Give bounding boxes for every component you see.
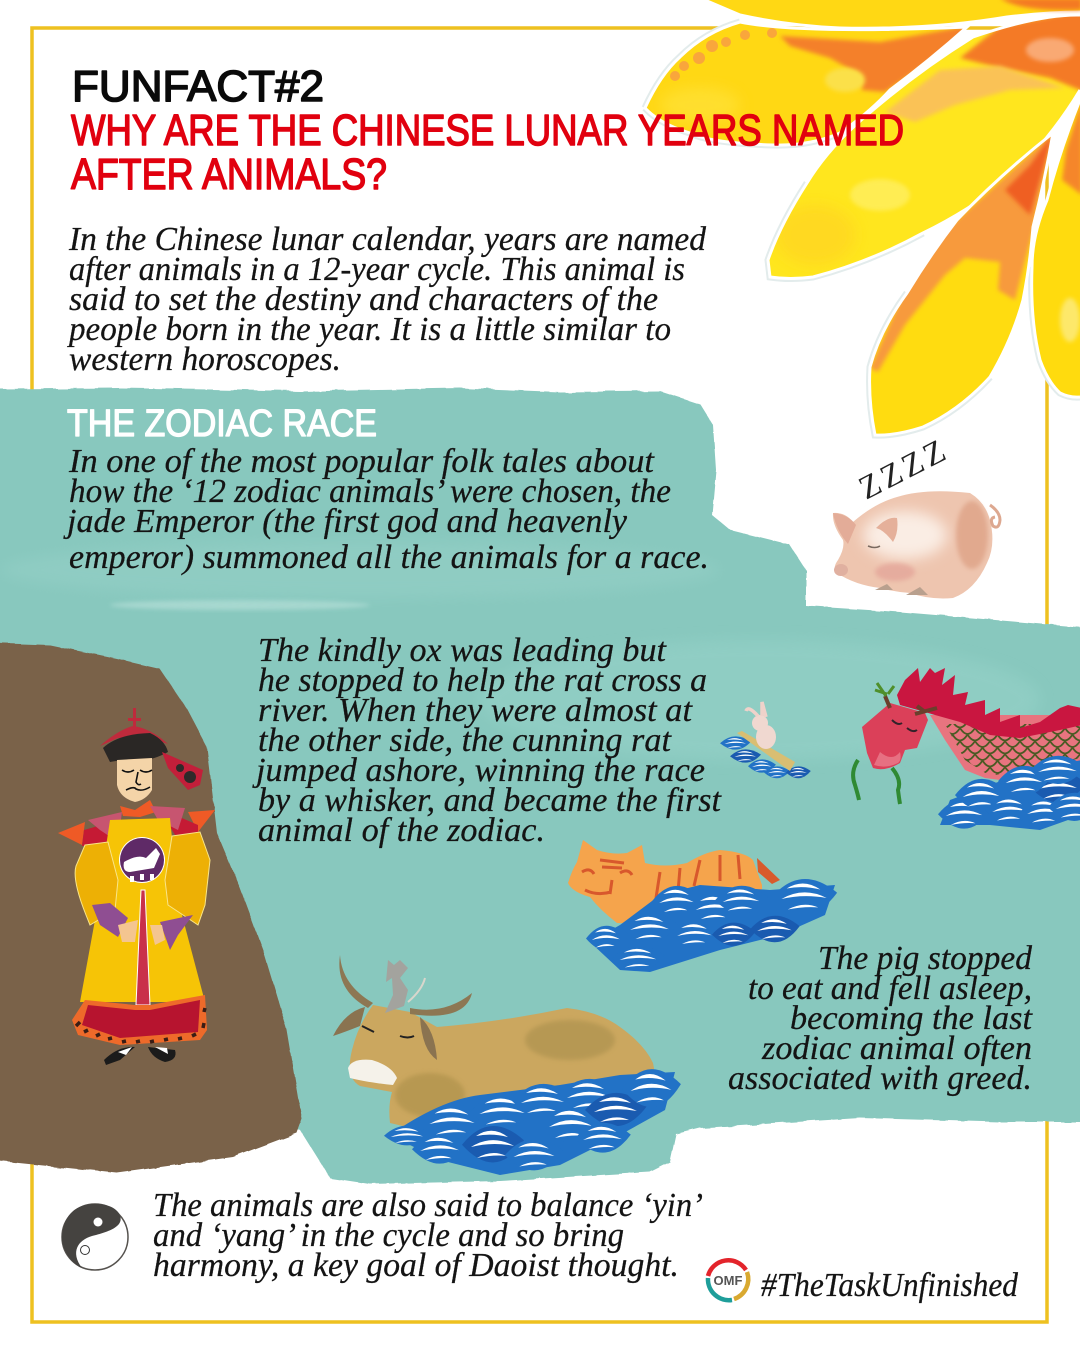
illustration: dragon with waves	[853, 668, 1080, 830]
top petal	[700, 0, 1080, 28]
text block: folk tale	[63, 443, 709, 576]
icon: OMF logo	[708, 1260, 748, 1300]
illustration: ox and rat with waves	[333, 955, 681, 1175]
petal: upper left	[646, 24, 962, 144]
text block: pig: to eat and fell asleep,	[748, 970, 1032, 1007]
text block: introduction: after animals in a 12-year cycle. This animal is	[69, 251, 685, 288]
petal: right edge	[1033, 104, 1080, 397]
illustration: tiger with waves	[568, 840, 837, 972]
text block: introduction	[67, 221, 707, 378]
text block: introduction: In the Chinese lunar calendar, years are named	[68, 221, 707, 258]
panel: teal watercolour wash	[0, 388, 1080, 1184]
petal shadow outlines	[645, 22, 1080, 435]
label: zzzz sleep mark: ZZZZ	[853, 433, 952, 507]
text block: ox and rat	[252, 632, 723, 849]
heading: main question: AFTER ANIMALS?	[71, 150, 387, 199]
text: hashtag: #TheTaskUnfinished	[761, 1267, 1019, 1304]
text block: folk tale: emperor) summoned all the animals for a race.	[69, 539, 709, 576]
text block: pig: becoming the last	[790, 1000, 1034, 1037]
text block: ox and rat: river. When they were almost at	[258, 692, 694, 729]
text block: pig: associated with greed.	[728, 1060, 1032, 1097]
text block: folk tale: jade Emperor (the first god and heavenly	[63, 503, 628, 540]
illustration: sleeping pig	[833, 491, 1000, 598]
heading: main question: WHY ARE THE CHINESE LUNAR YEARS NAMED	[71, 106, 904, 155]
text block: pig	[728, 940, 1034, 1097]
petal: lower	[871, 136, 1051, 434]
text block: ox and rat: The kindly ox was leading but	[258, 632, 668, 669]
text block: pig: zodiac animal often	[761, 1030, 1032, 1067]
text block: yin and yang	[153, 1187, 703, 1284]
illustration: jade emperor	[58, 708, 215, 1065]
text block: yin and yang: and ‘yang’ in the cycle and so bring	[153, 1217, 624, 1254]
illustration: rabbit on log	[720, 702, 811, 778]
text block: ox and rat: the other side, the cunning rat	[258, 722, 673, 759]
text block: introduction: said to set the destiny and characters of the	[69, 281, 658, 318]
text block: introduction: people born in the year. It is a little similar to	[67, 311, 671, 348]
text block: ox and rat: animal of the zodiac.	[258, 812, 545, 849]
text block: yin and yang: harmony, a key goal of Daoist thought.	[153, 1247, 679, 1284]
icon: yellow and orange flower petals	[640, 0, 1080, 440]
icon: OMF logo: OMF	[714, 1273, 742, 1288]
text block: ox and rat: jumped ashore, winning the race	[252, 752, 705, 789]
heading: fun fact number: FUNFACT#2	[72, 62, 324, 111]
text block: folk tale: how the ‘12 zodiac animals’ were chosen, the	[69, 473, 671, 510]
text block: ox and rat: he stopped to help the rat cross a	[258, 662, 707, 699]
heading: the zodiac race: THE ZODIAC RACE	[67, 403, 377, 445]
text block: folk tale: In one of the most popular folk tales about	[68, 443, 656, 480]
panel: brown watercolour hill	[0, 643, 302, 1173]
petal: large middle	[760, 10, 1080, 290]
text block: introduction: western horoscopes.	[69, 341, 341, 378]
heading: main question	[71, 106, 904, 199]
text block: pig: The pig stopped	[818, 940, 1033, 977]
text block: ox and rat: by a whisker, and became the first	[258, 782, 723, 819]
icon: yin yang	[62, 1204, 128, 1270]
text block: yin and yang: The animals are also said to balance ‘yin’	[153, 1187, 703, 1224]
